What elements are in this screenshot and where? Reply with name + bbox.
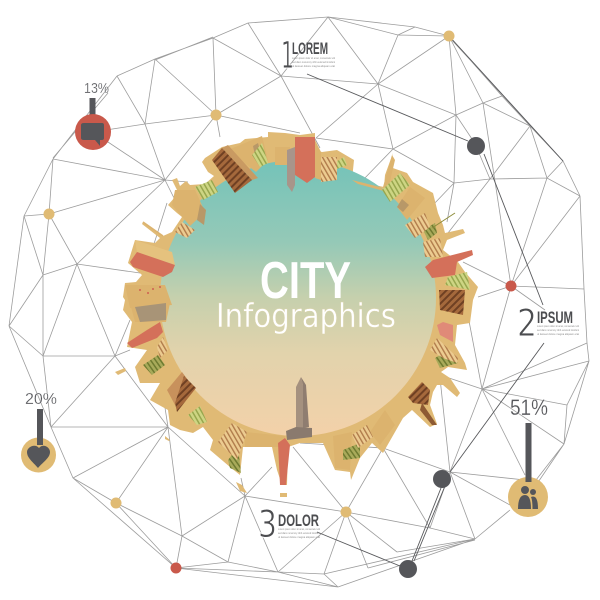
red buildings bbox=[127, 137, 473, 485]
grey towers and blocks bbox=[287, 147, 295, 192]
green striped roofs bbox=[195, 180, 218, 200]
striped tan buildings bbox=[175, 222, 195, 238]
stat: 51% people bbox=[508, 395, 548, 517]
label 1 lorem: LOREM bbox=[292, 39, 328, 58]
tan blocks bbox=[125, 136, 425, 470]
title: Infographics bbox=[216, 296, 396, 335]
red dots on left block bbox=[139, 286, 161, 294]
label 2 ipsum bbox=[517, 302, 579, 345]
label 3 dolor: 3 bbox=[258, 503, 277, 546]
brown buildings bbox=[167, 290, 465, 425]
label 2 ipsum: Lorem ipsum dolor sit amet, consectetur elit bbox=[537, 324, 579, 328]
olive roofs bbox=[143, 355, 165, 375]
label 3 dolor bbox=[258, 503, 320, 546]
city buildings bbox=[115, 136, 473, 497]
label 1 lorem: Lorem ipsum dolor sit amet, consectetur elit bbox=[292, 56, 335, 60]
stat: 51% people: 51% bbox=[510, 395, 548, 420]
label 1 lorem: 1 bbox=[281, 34, 294, 77]
label 2 ipsum: ut laoreet dolore magna aliquam erat bbox=[537, 332, 579, 336]
title bbox=[216, 252, 396, 335]
stat: 13% speech bubble bbox=[75, 80, 111, 150]
label 2 ipsum: IPSUM bbox=[537, 308, 573, 327]
label 1 lorem: ut laoreet dolore magna aliquam erat bbox=[292, 64, 335, 68]
main tower bbox=[286, 377, 312, 440]
leader lines bbox=[307, 36, 563, 566]
label 3 dolor: ut laoreet dolore magna aliquam erat bbox=[278, 535, 320, 539]
stat: 20% heart bbox=[21, 391, 57, 472]
label 3 dolor: DOLOR bbox=[278, 511, 319, 530]
label 3 dolor: Lorem ipsum dolor sit amet, consectetur elit bbox=[278, 527, 320, 531]
label 1 lorem bbox=[281, 34, 335, 77]
label 1 lorem: sed diam nonummy nibh euismod tincidunt bbox=[292, 60, 335, 64]
title: CITY bbox=[260, 252, 351, 310]
shaded block details bbox=[197, 143, 409, 225]
antenna spires bbox=[143, 222, 163, 236]
network nodes bbox=[44, 30, 516, 578]
label 2 ipsum: 2 bbox=[517, 302, 537, 345]
label 3 dolor: sed diam nonummy nibh euismod tincidunt bbox=[278, 531, 320, 535]
big brown building top left bbox=[212, 145, 258, 193]
stat: 13% speech bubble: 13% bbox=[84, 80, 109, 97]
sky circle bbox=[160, 160, 436, 436]
label 2 ipsum: sed diam nonummy nibh euismod tincidunt bbox=[537, 328, 579, 332]
small detached tan bits bbox=[115, 368, 287, 497]
stat: 20% heart: 20% bbox=[25, 391, 57, 408]
city ring silhouette bbox=[123, 132, 478, 485]
